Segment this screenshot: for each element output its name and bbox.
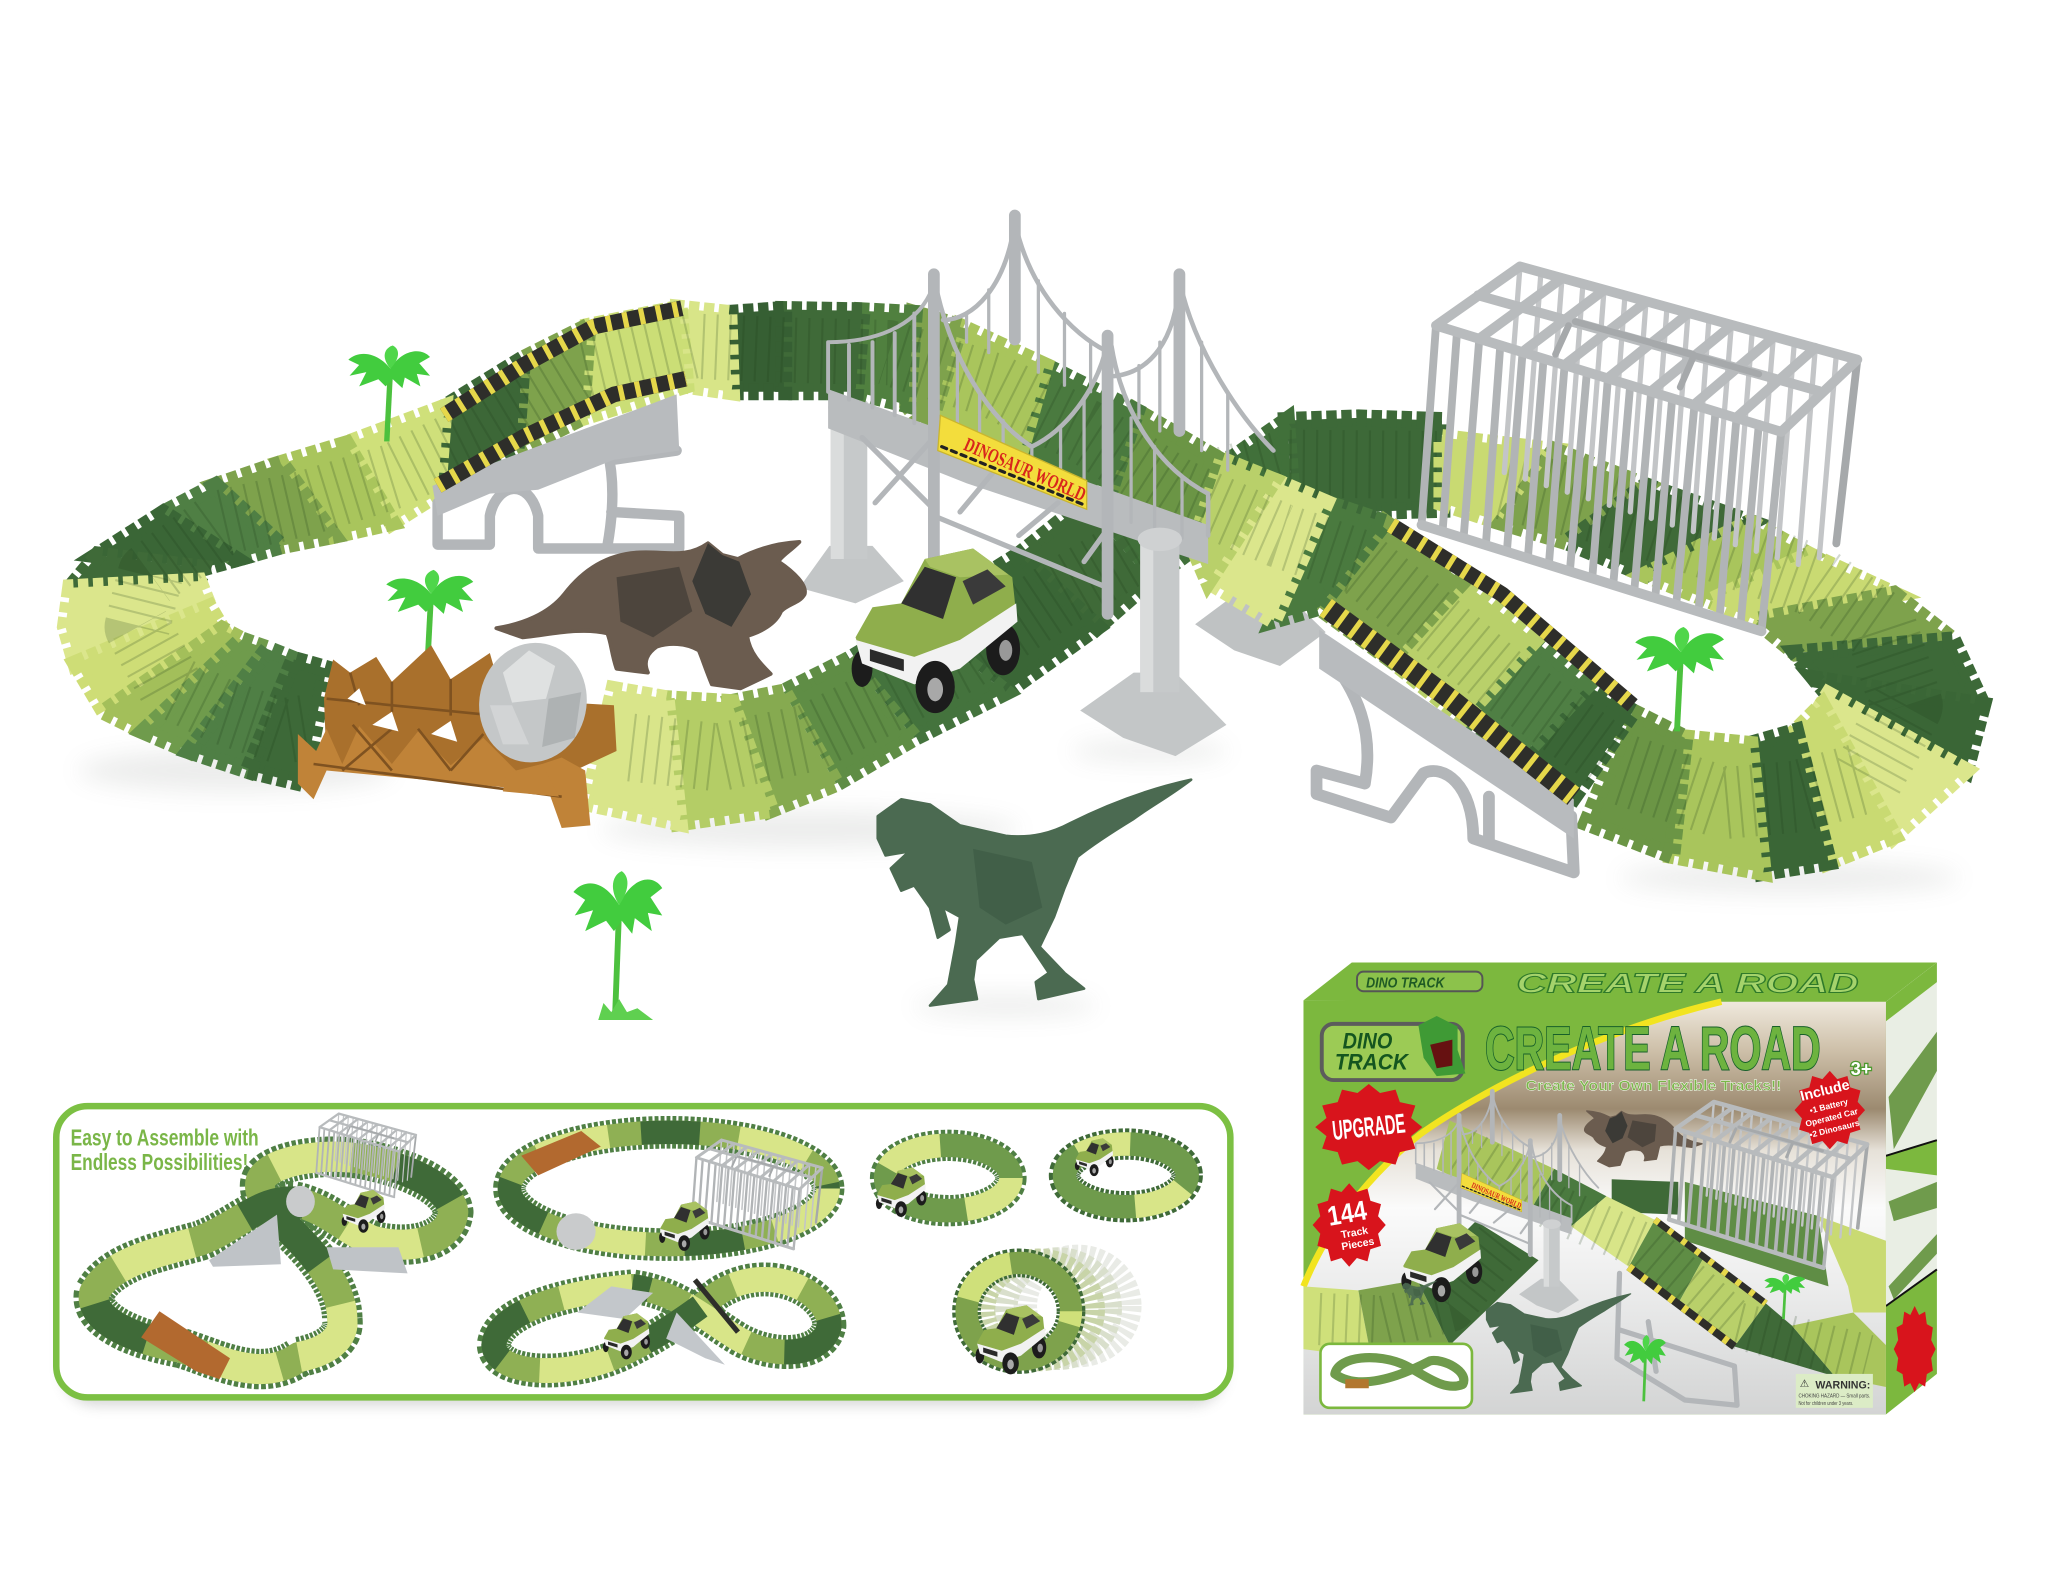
box car [1401,1223,1482,1302]
box palm front [1624,1335,1666,1401]
track: lower crossing section [588,418,1442,823]
left ramp support [432,394,679,549]
track: upper run from ramp over bridge and around left loop [65,308,1633,797]
front fence post [503,764,559,797]
warning label: CHOKING HAZARD — Small parts. [1798,1393,1871,1399]
box triceratops [1585,1111,1702,1167]
warning label: ⚠ [1800,1379,1809,1390]
layout three: figure eight with ramps [494,1279,829,1371]
left ramp rails [438,308,686,486]
triceratops figure [496,542,805,688]
yellow curve [1303,1002,1721,1286]
panel heading [71,1124,259,1175]
burst: include: Include [1799,1077,1851,1105]
box scene track [1303,1121,1886,1405]
box top face: DINO TRACK [1366,975,1446,991]
burst: 144 track pieces: 144 [1325,1194,1370,1232]
right ramp rails [1326,525,1633,797]
toy car [852,549,1020,713]
t-rex figure [878,780,1191,1006]
box right side face [1886,963,1937,1414]
soft floor shadows [78,740,1959,1016]
dino track logo: DINO [1343,1029,1392,1054]
grey faceted egg [468,633,598,773]
layout four: banked ring [876,1145,1011,1217]
burst: include: •2 Dinosaurs [1808,1118,1861,1140]
panel frame [56,1106,1230,1405]
box top face [1303,963,1937,1002]
create a road title: CREATE A ROAD [1485,1015,1821,1084]
box subtitle: Create Your Own Flexible Tracks!! [1525,1078,1781,1095]
inset thumbnail [1320,1281,1472,1408]
panel heading: Easy to Assemble with [71,1124,259,1150]
wooden gate fence [298,645,617,828]
box palm right [1764,1274,1805,1319]
box t-rex [1486,1294,1631,1393]
layout one: teardrop figure eight [94,1114,453,1379]
warning label: Not for children under 3 years. [1798,1401,1853,1407]
layout six: loop with motion ghosts [967,1256,1130,1374]
metal dinosaur cage [1422,266,1857,631]
track: right loop [1442,438,1983,872]
suspension bridge with Dinosaur World sign [828,215,1273,756]
burst: 144 track pieces: Pieces [1341,1236,1375,1253]
warning label: WARNING: [1815,1379,1870,1391]
palm tree top left [348,346,430,441]
rear pylon base [1195,590,1326,666]
burst: 144 track pieces: Track [1340,1226,1369,1241]
layout two: oval with cage [509,1131,828,1251]
box front green base [1303,1000,1886,1414]
box scene background [1303,1002,1886,1414]
palm tree front [573,871,662,1020]
main track playset scene [65,215,1983,1020]
dino track logo [1322,1016,1465,1080]
age badge: 3+ [1851,1058,1872,1079]
burst: 144 track pieces [1313,1183,1386,1267]
right ramp support [1317,629,1574,872]
product box [1303,963,1937,1414]
burst: include [1795,1071,1865,1149]
box bridge [1416,1091,1598,1313]
layout five: tilted ring [1064,1138,1187,1207]
rear left pylon [799,396,904,603]
warning label [1796,1374,1873,1408]
burst: include: •1 Battery [1809,1096,1849,1116]
burst: include: Operated Car [1804,1106,1860,1129]
burst: upgrade: UPGRADE [1331,1107,1407,1146]
dino track logo: TRACK [1335,1050,1410,1075]
panel: easy to assemble [56,1106,1230,1405]
burst: upgrade [1315,1084,1422,1170]
box cage [1669,1102,1867,1268]
box top face: CREATE A ROAD [1516,968,1859,999]
palm tree right [1635,627,1724,731]
palm tree centre left [386,570,473,669]
panel heading: Endless Possibilities! [71,1149,248,1175]
